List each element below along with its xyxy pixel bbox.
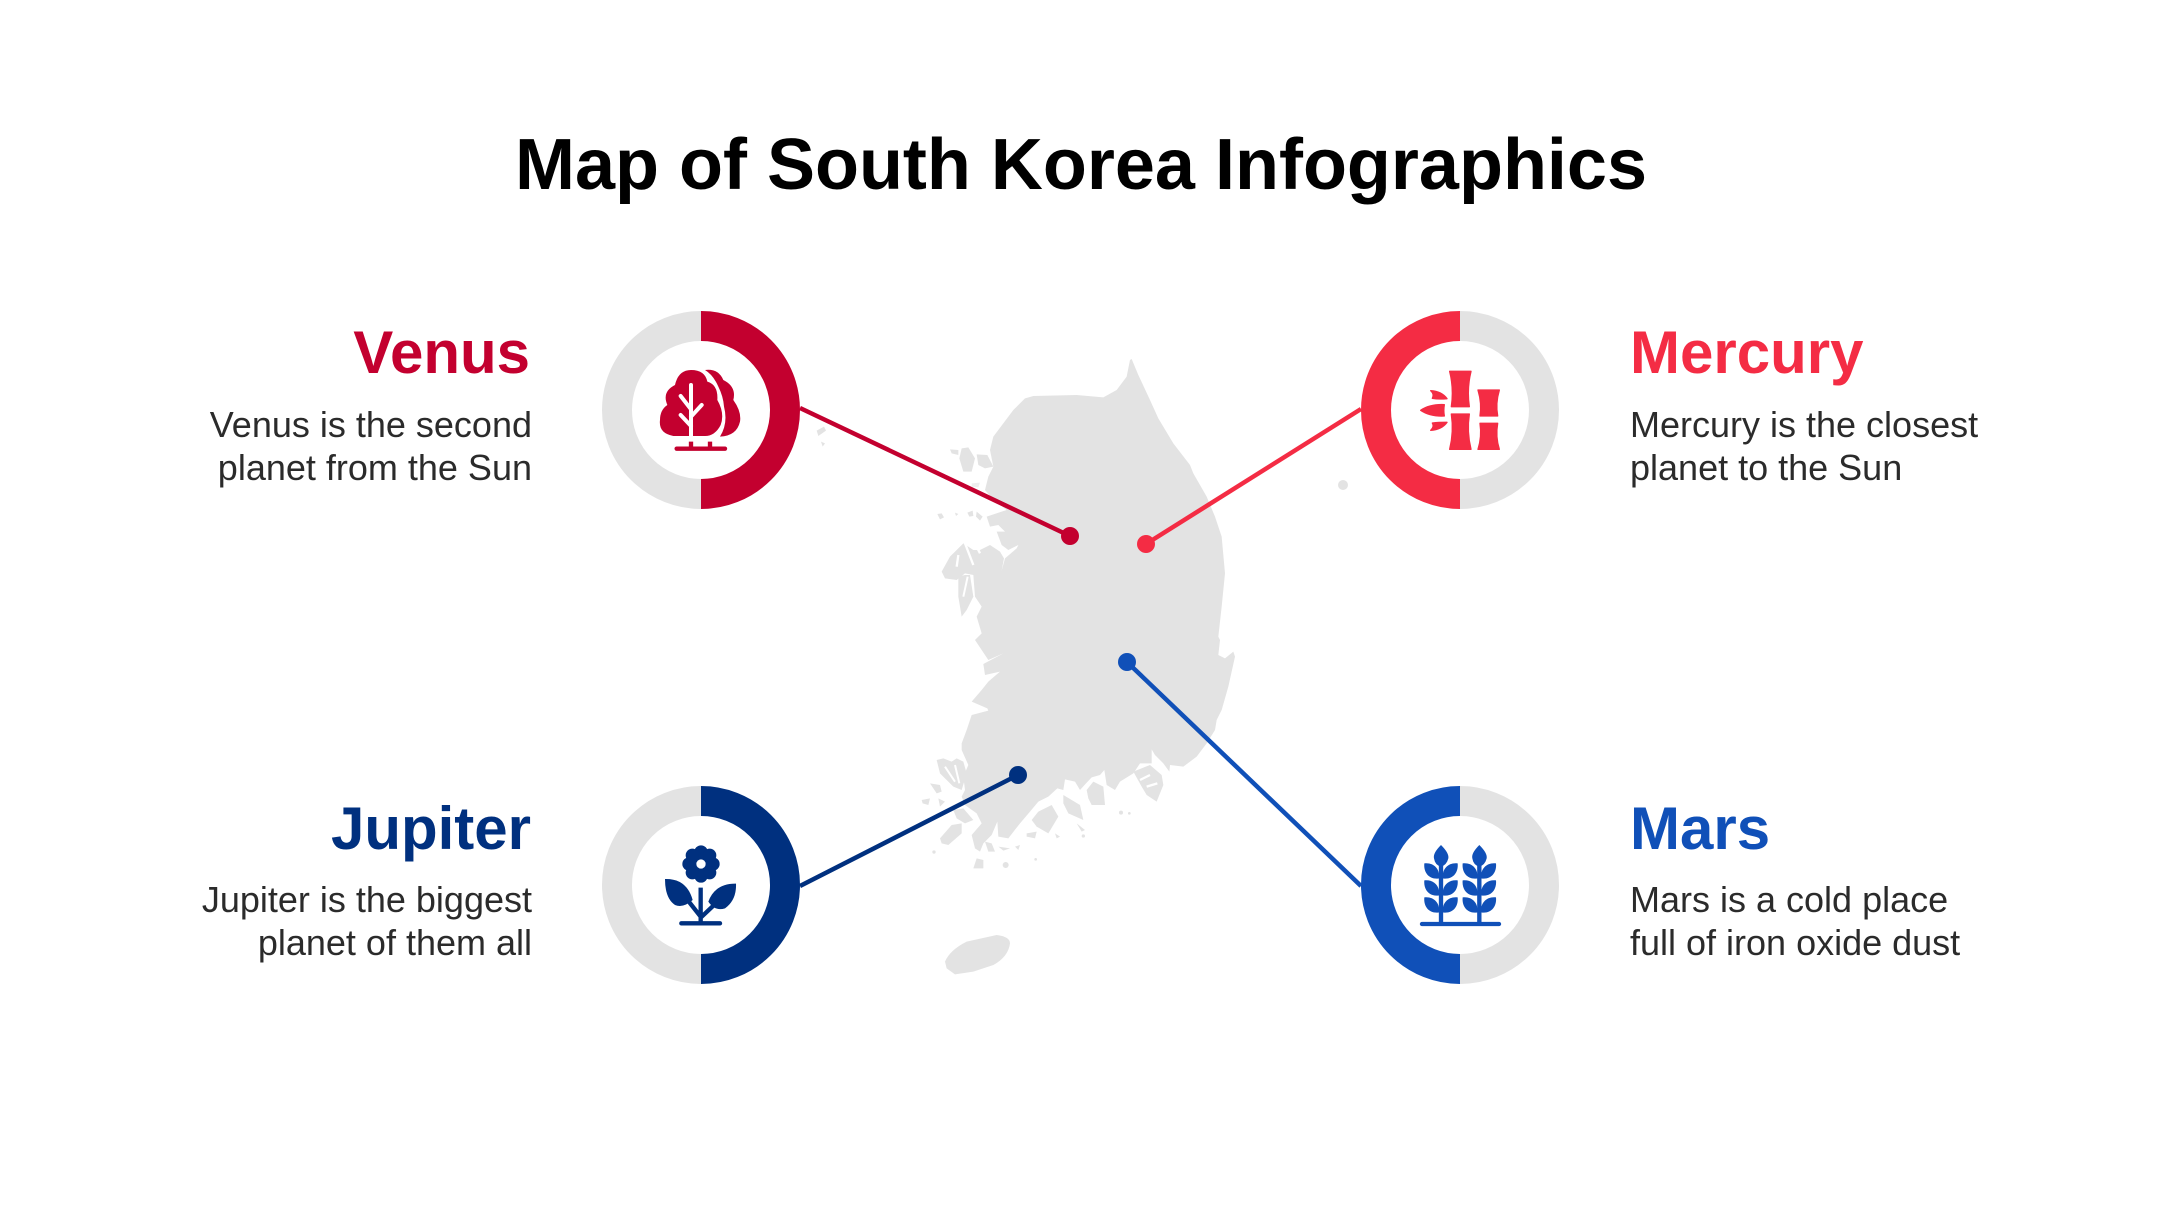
Venus connector line [800, 408, 1070, 536]
Jupiter heading: Jupiter [331, 795, 531, 862]
Venus marker dot [1061, 527, 1079, 545]
Mercury description: Mercury is the closest [1630, 404, 1978, 445]
Mars connector line [1127, 662, 1361, 886]
upper west islands [959, 447, 975, 472]
Venus ring [617, 326, 785, 494]
icon: flower [665, 845, 736, 923]
Mercury marker dot [1137, 535, 1155, 553]
Venus description: planet from the Sun [218, 447, 532, 488]
Venus heading: Venus [353, 319, 530, 386]
icon: wheat [1422, 845, 1499, 924]
icon: bamboo [1421, 371, 1499, 449]
Mercury ring [1376, 326, 1544, 494]
title: Map of South Korea Infographics [515, 125, 1647, 205]
Venus description: Venus is the second [210, 404, 532, 445]
Mercury heading: Mercury [1630, 319, 1864, 386]
panel: Mars [1118, 653, 1960, 969]
west-central island arc [958, 575, 973, 617]
icon: trees [660, 370, 740, 449]
Jupiter description: planet of them all [258, 922, 532, 963]
panel: Jupiter [202, 766, 1027, 969]
panel: Mercury [1137, 319, 1978, 553]
southern islands [922, 758, 1163, 868]
map of South Korea [817, 359, 1235, 974]
far west islets [817, 427, 826, 436]
Mars description: full of iron oxide dust [1630, 922, 1960, 963]
Mercury description: planet to the Sun [1630, 447, 1902, 488]
Jupiter ring [617, 801, 785, 969]
Jupiter marker dot [1009, 766, 1027, 784]
panel: Venus [210, 319, 1079, 545]
Mercury connector line [1146, 409, 1361, 544]
Jeju island [945, 935, 1010, 974]
Mars heading: Mars [1630, 795, 1770, 862]
Jupiter connector line [800, 775, 1018, 886]
Mars marker dot [1118, 653, 1136, 671]
Jupiter description: Jupiter is the biggest [202, 879, 532, 920]
western islets [937, 511, 983, 521]
Mars ring [1376, 801, 1544, 969]
Mars description: Mars is a cold place [1630, 879, 1948, 920]
Ulleungdo islet [1338, 480, 1348, 490]
